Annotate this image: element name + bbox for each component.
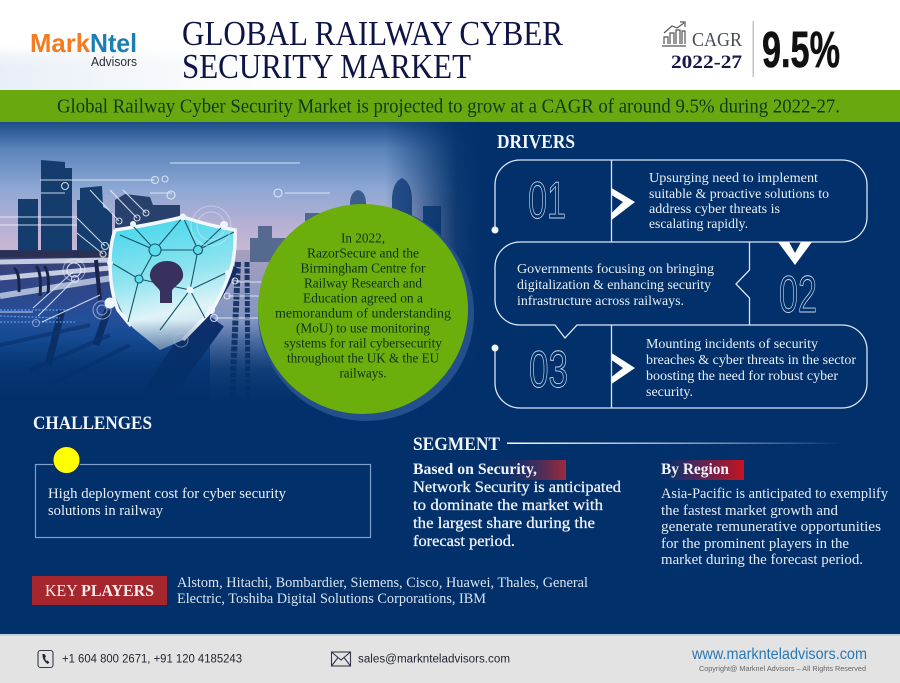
icon: growth chart: [662, 22, 686, 46]
hero photo: city, rails and cyber shield: [0, 122, 480, 402]
callout text: Education agreed on a: [303, 292, 424, 306]
driver 03: [529, 337, 856, 400]
driver 03: breaches & cyber threats in the sector: [646, 353, 856, 368]
CAGR block: [662, 21, 840, 78]
segment: by region: Asia-Pacific is anticipated to exemplify: [661, 486, 888, 502]
key players badge: KEY PLAYERS: [45, 581, 154, 600]
segment: by region: the fastest market growth and: [661, 503, 838, 519]
driver 01: 01: [528, 172, 566, 230]
yellow marker: [53, 446, 80, 474]
icon: phone: [38, 650, 53, 668]
keyhole: [150, 261, 183, 303]
key players list: Electric, Toshiba Digital Solutions Corporations, IBM: [177, 591, 486, 607]
segment: by region: for the prominent players in the: [661, 536, 849, 552]
segment: by region: [650, 460, 888, 568]
panel: challenges: [36, 446, 370, 538]
segment: by security: Network Security is anticipated: [413, 479, 621, 496]
rail tracks: [0, 254, 248, 400]
header background: [0, 0, 900, 90]
logo: MarkNtel Advisors: [30, 28, 137, 69]
driver 01: escalating rapidly.: [649, 217, 748, 232]
circuit lines: [0, 163, 335, 347]
driver 03: Mounting incidents of security: [646, 337, 818, 352]
challenge text: solutions in railway: [48, 503, 163, 519]
driver 02: Governments focusing on bringing: [517, 262, 714, 277]
driver 03: security.: [646, 385, 693, 400]
arrow: driver 1: [612, 188, 635, 220]
skyline: [18, 160, 441, 262]
email: sales@marknteladvisors.com: [358, 654, 510, 666]
arrow: driver 3: [612, 353, 635, 384]
shield: [104, 214, 235, 350]
CAGR period: 2022-27: [671, 52, 743, 73]
footer: [0, 634, 900, 683]
green banner: Global Railway Cyber Security Market is projected to grow at a CAGR of around 9.5% during 2022-27.: [57, 96, 840, 118]
key players list: [177, 575, 588, 607]
segment: by security: forecast period.: [413, 533, 515, 550]
segment heading: SEGMENT: [413, 434, 500, 455]
logo: MarkNtel Advisors: Ntel: [90, 28, 137, 58]
challenge text: High deployment cost for cyber security: [48, 486, 286, 502]
drivers heading: DRIVERS: [497, 131, 575, 153]
connector outline: [495, 160, 867, 408]
callout text: In 2022,: [341, 232, 385, 246]
key players list: Alstom, Hitachi, Bombardier, Siemens, Cisco, Huawei, Thales, General: [177, 575, 588, 591]
callout text: (MoU) to use monitoring: [296, 322, 430, 336]
key players badge: [32, 576, 167, 605]
callout text: throughout the UK & the EU: [287, 352, 439, 366]
driver 02: [517, 262, 817, 324]
driver 01: Upsurging need to implement: [649, 171, 818, 186]
segment: by security: to dominate the market with: [413, 497, 603, 514]
logo: MarkNtel Advisors: Advisors: [91, 54, 137, 69]
driver 02: digitalization & enhancing security: [517, 278, 711, 293]
challenge text: [48, 486, 286, 519]
segment: by security: the largest share during the: [413, 515, 595, 532]
callout: green circle: [258, 204, 474, 421]
segment: by region: By Region: [661, 461, 729, 478]
segment: by security: Based on Security,: [413, 461, 537, 478]
callout text: systems for rail cybersecurity: [284, 336, 442, 352]
segment: by region: market during the forecast period.: [661, 552, 863, 568]
segment: by region: generate remunerative opportunities: [661, 519, 881, 535]
copyright: Copyright@ Marknel Advisors – All Rights Reserved: [699, 664, 866, 673]
challenges heading: CHALLENGES: [33, 413, 152, 434]
CAGR label: CAGR: [692, 29, 743, 51]
navy main panel: [0, 122, 900, 634]
icon: mail: [332, 652, 350, 666]
phone numbers: +1 604 800 2671, +91 120 4185243: [62, 654, 242, 666]
CAGR value: 9.5%: [762, 21, 840, 78]
callout text: RazorSecure and the: [307, 246, 419, 262]
logo: MarkNtel Advisors: Mark: [30, 28, 91, 58]
title: GLOBAL RAILWAY CYBER: [182, 15, 563, 53]
callout text: Railway Research and: [304, 276, 422, 292]
callout text: [275, 232, 451, 382]
driver 01: suitable & proactive solutions to: [649, 187, 829, 202]
driver 03: boosting the need for robust cyber: [646, 369, 838, 384]
panel: drivers flow: [492, 160, 867, 408]
segment: by security: [413, 460, 621, 550]
title: SECURITY MARKET: [182, 48, 471, 86]
callout text: memorandum of understanding: [275, 306, 451, 322]
driver 01: [528, 171, 829, 232]
callout text: railways.: [340, 366, 386, 382]
callout text: Birmingham Centre for: [300, 262, 426, 276]
driver 02: 02: [779, 266, 817, 324]
driver 02: infrastructure across railways.: [517, 294, 684, 309]
website: www.marknteladvisors.com: [691, 646, 867, 663]
arrow: driver 2: [778, 242, 812, 265]
driver 03: 03: [529, 341, 568, 399]
title: [182, 15, 563, 86]
driver 01: address cyber threats is: [649, 202, 780, 217]
green banner: [0, 90, 900, 122]
